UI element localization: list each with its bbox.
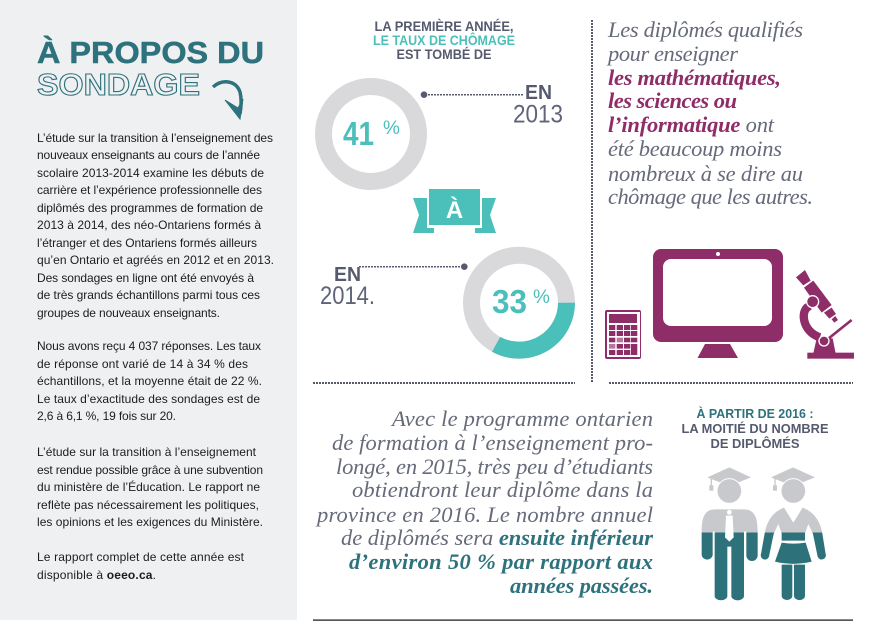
label: en 2013: EN: [525, 82, 552, 104]
text block: paragraph 3: les opinions et les exigences du Ministère.: [37, 515, 263, 529]
label: en 2014: EN: [334, 264, 361, 286]
heading: half of graduates: [682, 406, 828, 451]
chart: donut 41 percent: [324, 86, 418, 182]
text block: paragraph 2: échantillons, et la moyenne était de 22 %.: [37, 374, 262, 388]
text block: paragraph 1: groupes de nouveaux enseignants.: [37, 306, 220, 320]
heading: unemployment rate: EST TOMBÉ DE: [396, 47, 492, 62]
text block: paragraph 1: Des sondages en ligne ont été envoyés à: [37, 271, 254, 285]
text block: paragraph 3: est rendue possible grâce à une subvention: [37, 463, 263, 477]
label: en 2014: 2014.: [320, 282, 375, 310]
text block: program extension: de diplômés sera ensuite inférieur: [341, 525, 653, 550]
callout: math science computing graduates: [606, 17, 813, 209]
text block: paragraph 2: Nous avons reçu 4 037 réponses. Les taux: [37, 339, 261, 353]
text block: paragraph 4: [37, 550, 245, 582]
text block: paragraph 1: l’étranger et des Ontariens formés ailleurs: [37, 236, 257, 250]
icon: curved arrow: [213, 82, 243, 119]
icon: computer monitor: [653, 249, 783, 358]
text block: program extension: de formation à l’enseignement pro-: [332, 430, 653, 455]
text block: paragraph 2: Le taux d’exactitude des sondages est de: [37, 392, 260, 406]
text block: paragraph 1: de très grands échantillons parmi tous ces: [37, 288, 260, 302]
callout: math science computing graduates: Les diplômés qualifiés: [607, 17, 803, 42]
heading: unemployment rate: [373, 19, 515, 62]
heading: half of graduates: À PARTIR DE 2016 :: [696, 406, 814, 421]
text block: paragraph 2: 2,6 à 6,1 %, 19 fois sur 20.: [37, 409, 176, 423]
panel: about the survey: [0, 0, 297, 620]
text block: paragraph 1: carrière et l’expérience professionnelle des: [37, 183, 262, 197]
callout: math science computing graduates: les sciences ou: [608, 88, 737, 113]
chart: donut 33 percent: 33: [492, 283, 527, 320]
chart: donut 41 percent: 41: [343, 115, 374, 152]
bottom rule: [313, 620, 853, 621]
text block: paragraph 3: [37, 445, 263, 529]
text block: program extension: province en 2016. Le nombre annuel: [315, 502, 653, 527]
chart: donut 33 percent: %: [533, 287, 550, 308]
text block: program extension: [315, 406, 653, 598]
text block: paragraph 2: [37, 339, 262, 423]
text block: paragraph 4: disponible à oeeo.ca.: [37, 568, 156, 582]
heading: unemployment rate: LE TAUX DE CHÔMAGE: [373, 33, 515, 48]
label: en 2013: [421, 82, 563, 128]
icon: microscope: [796, 270, 854, 359]
text block: paragraph 2: de réponse ont varié de 14 à 34 % des: [37, 357, 248, 371]
text block: paragraph 3: du ministère de l’Éducation. Le rapport ne: [37, 479, 260, 494]
icon: ribbon with À: [413, 189, 496, 233]
icon: female graduate: [761, 467, 826, 600]
callout: math science computing graduates: été beaucoup moins: [608, 136, 782, 161]
title: sondage outlined: SONDAGE: [37, 67, 200, 102]
text block: program extension: années passées.: [510, 573, 653, 598]
text block: program extension: obtiendront leur diplôme dans la: [352, 477, 653, 502]
text block: program extension: d’environ 50 % par rapport aux: [349, 549, 653, 574]
divider lines: [313, 20, 853, 383]
chart: donut 33 percent: [472, 255, 566, 350]
callout: math science computing graduates: pour enseigner: [606, 41, 738, 66]
label: en 2013: 2013: [513, 100, 563, 128]
icon: male graduate: [702, 467, 758, 600]
text block: paragraph 1: [37, 131, 274, 320]
text block: paragraph 3: reflète pas nécessairement les politiques,: [37, 498, 259, 512]
text block: paragraph 1: qu’en Ontario et agréés en 2012 et en 2013.: [37, 253, 274, 267]
text block: program extension: Avec le programme ontarien: [390, 406, 653, 431]
heading: unemployment rate: LA PREMIÈRE ANNÉE,: [374, 19, 514, 34]
callout: math science computing graduates: les mathématiques,: [608, 65, 781, 90]
text block: paragraph 1: L’étude sur la transition à l’enseignement des: [37, 131, 273, 145]
text block: paragraph 1: scolaire 2013-2014 examine les débuts de: [37, 166, 264, 180]
callout: math science computing graduates: chômage que les autres.: [608, 184, 813, 209]
text block: paragraph 3: L’étude sur la transition à l’enseignement: [37, 445, 257, 459]
callout: math science computing graduates: nombreux à se dire au: [608, 161, 803, 186]
chart: donut 41 percent: %: [383, 118, 400, 139]
title: À propos du: À PROPOS DU: [37, 35, 264, 70]
icon: graduates half filled: [702, 467, 826, 600]
callout: math science computing graduates: l’informatique ont: [608, 112, 775, 137]
icon: calculator: [605, 310, 641, 359]
text block: paragraph 4: Le rapport complet de cette année est: [37, 550, 245, 564]
icon: ribbon with À: À: [446, 196, 463, 224]
text block: paragraph 1: nouveaux enseignants au cours de l’année: [37, 148, 260, 162]
heading: half of graduates: DE DIPLÔMÉS: [710, 436, 800, 451]
text block: program extension: longé, en 2015, très peu d’étudiants: [336, 454, 653, 479]
label: en 2014: [320, 263, 468, 310]
text block: paragraph 1: diplômés des programmes de formation de: [37, 201, 263, 215]
text block: paragraph 1: 2013 à 2014, des néo-Ontariens formés à: [37, 218, 261, 232]
heading: half of graduates: LA MOITIÉ DU NOMBRE: [682, 421, 828, 436]
